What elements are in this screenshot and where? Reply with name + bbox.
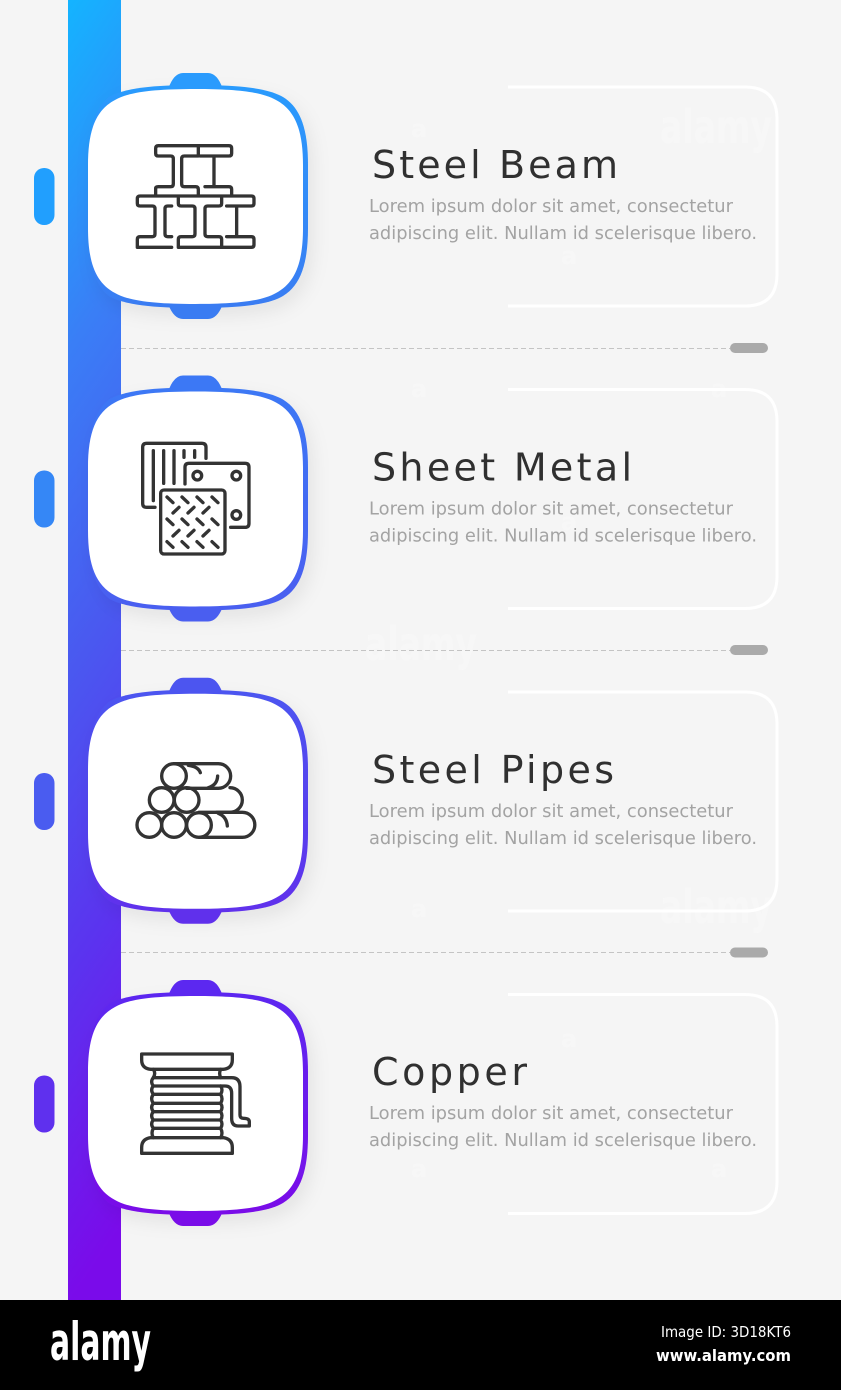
description: Lorem ipsum dolor sit amet, consectetur [369,1103,734,1124]
divider 2 [121,645,768,655]
watermarks: a [711,375,727,403]
watermarks: a [411,895,427,923]
icon: steel beams [137,146,254,247]
footer logo: alamy [50,1312,151,1373]
row: Steel Beam [34,73,777,319]
side marker pill [34,773,54,830]
outline bracket [508,994,777,1214]
heading: Sheet Metal [372,446,632,490]
icon card [88,980,308,1226]
icon: copper spool [142,1054,249,1153]
row: Copper [34,980,777,1226]
divider 1 [121,343,768,353]
row: Sheet Metal [34,376,777,622]
outline bracket [508,390,777,608]
watermarks: a [411,115,427,143]
outline bracket [508,692,777,911]
description: adipiscing elit. Nullam id scelerisque libero. [369,526,757,546]
watermarks: a [561,508,577,536]
description: adipiscing elit. Nullam id scelerisque libero. [369,828,757,849]
watermarks: a [411,375,427,403]
website: www.alamy.com [656,1346,791,1365]
description [369,498,757,546]
watermarks: a [561,1025,577,1053]
footer bar [0,1300,841,1390]
heading: Steel Beam [372,143,618,187]
icon: steel pipes [137,764,255,837]
icon card [88,73,308,319]
description: adipiscing elit. Nullam id scelerisque libero. [369,1130,757,1151]
icon card [88,678,308,924]
watermarks: a [711,1155,727,1183]
heading: Steel Pipes [372,748,614,792]
watermarks: alamy [660,100,772,154]
watermarks: alamy [365,617,477,671]
description [369,1103,757,1151]
heading: Copper [372,1050,527,1094]
divider 3 [121,948,768,958]
watermarks: a [561,242,577,270]
description: adipiscing elit. Nullam id scelerisque libero. [369,223,757,244]
side marker pill [34,1076,54,1132]
side marker pill [34,168,54,225]
outline bracket [508,87,777,306]
side marker pill [34,470,54,528]
description [369,196,757,244]
watermarks [365,100,772,1183]
vertical gradient bar [68,0,121,1300]
description [369,801,757,849]
description: Lorem ipsum dolor sit amet, consectetur [369,196,734,217]
watermarks: a [411,1155,427,1183]
watermarks: alamy [660,880,772,934]
image id: Image ID: 3D18KT6 [661,1323,791,1341]
description: Lorem ipsum dolor sit amet, consectetur [369,801,734,822]
icon: sheet metal [143,443,249,554]
icon card [88,376,308,622]
row: Steel Pipes [34,678,777,924]
description: Lorem ipsum dolor sit amet, consectetur [369,498,734,520]
